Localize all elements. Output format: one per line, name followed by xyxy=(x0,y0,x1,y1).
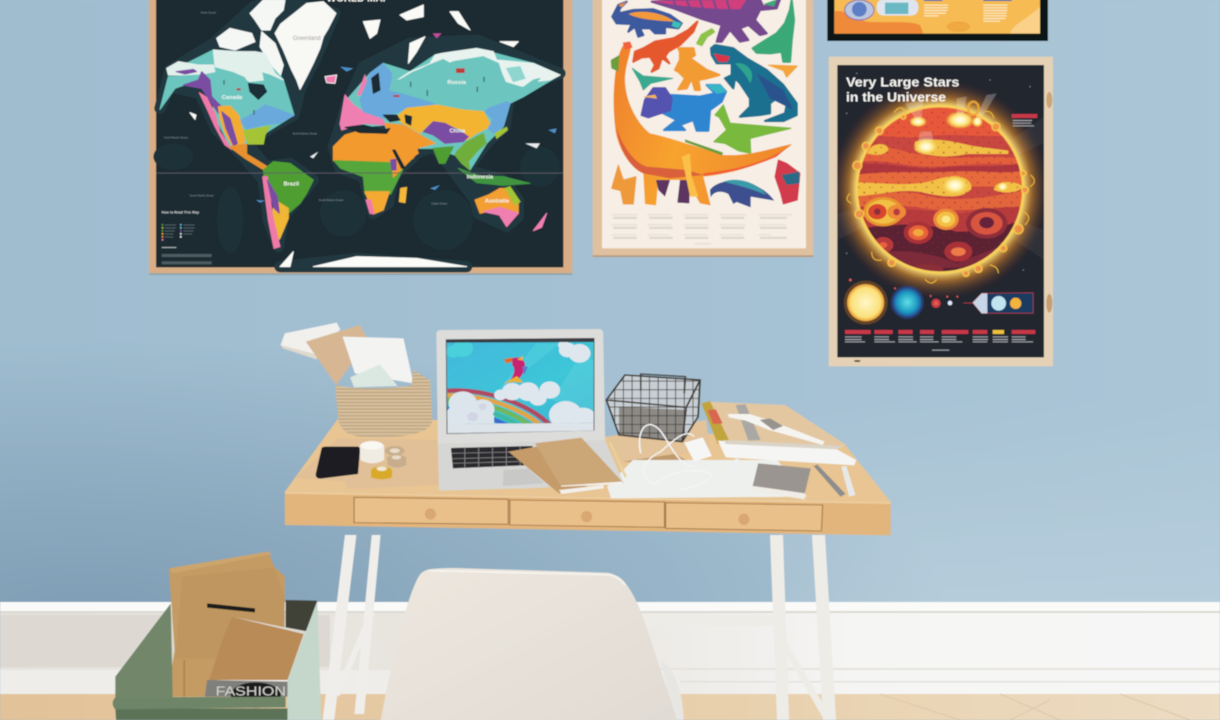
laptop wallpaper xyxy=(446,341,594,424)
canada forest xyxy=(160,75,293,115)
dinosaur: green tall xyxy=(753,0,794,62)
envelopes xyxy=(167,552,304,697)
dinosaur: purple crested xyxy=(652,0,780,42)
laptop bird xyxy=(504,356,528,383)
phone xyxy=(316,447,360,479)
dinosaur: ankylosaur bottom xyxy=(710,180,774,207)
dinosaur: yellow carnosaur xyxy=(675,48,719,90)
dinosaur: ankylosaur top xyxy=(612,2,682,37)
dinosaur: small yellow xyxy=(768,65,797,77)
magazine: FASHION xyxy=(216,684,286,698)
dinosaur: hadrosaur xyxy=(714,105,791,153)
storage bin with envelopes xyxy=(113,552,321,720)
hot spots xyxy=(913,138,939,155)
dinosaur: tyrannosaur xyxy=(711,45,797,121)
equator line xyxy=(156,172,563,174)
poster title: in the Universe xyxy=(846,89,946,104)
dinosaur: red bird xyxy=(775,160,800,204)
magazine xyxy=(205,680,288,708)
bin body xyxy=(113,601,321,720)
grey notebook xyxy=(752,463,811,499)
dinosaur: small lower left xyxy=(612,165,636,204)
pens xyxy=(722,458,855,497)
small stars comparison row xyxy=(844,279,1033,325)
star rim xyxy=(857,106,1023,273)
asia xyxy=(360,63,437,118)
desk with objects xyxy=(281,323,891,535)
kraft paper sheets xyxy=(295,402,846,489)
ocean labels: Indian Ocean xyxy=(431,202,448,206)
woven basket xyxy=(335,370,432,438)
map ocean depth halos xyxy=(160,0,560,267)
dinosaur: triceratops xyxy=(642,85,726,131)
map country labels: Brazil xyxy=(284,181,299,187)
map country labels: Indonesia xyxy=(467,175,494,181)
watch xyxy=(728,414,825,445)
papers in basket xyxy=(281,323,413,387)
desk front xyxy=(285,492,891,535)
map country labels xyxy=(222,36,510,204)
map legend: How to Read This Map xyxy=(162,210,199,214)
land base fills xyxy=(170,50,294,147)
laptop base xyxy=(438,441,624,491)
dinosaur: small teal xyxy=(632,68,673,90)
map country labels: China xyxy=(449,129,466,135)
dinosaur: sauropod xyxy=(611,41,792,205)
dinosaur: orange raptor xyxy=(633,22,697,72)
white paper xyxy=(607,460,807,498)
map country labels: Russia xyxy=(447,80,467,86)
africa xyxy=(333,131,413,163)
ocean labels xyxy=(164,10,448,206)
ocean labels: South Pacific Ocean xyxy=(190,193,214,197)
tape rolls xyxy=(360,441,406,479)
poster title: Very Large Stars xyxy=(846,75,959,90)
star data tables xyxy=(845,114,1037,351)
map country labels: Australia xyxy=(485,198,510,204)
map markers xyxy=(237,68,465,97)
panel: world map poster xyxy=(149,0,572,275)
dinosaur name captions xyxy=(612,214,792,244)
panel: very large stars poster xyxy=(829,57,1053,366)
map country labels: Greenland xyxy=(293,36,321,42)
light rays xyxy=(905,93,997,142)
charger xyxy=(684,437,712,462)
wire basket xyxy=(606,374,700,442)
pencil xyxy=(609,442,627,477)
map country labels: Canada xyxy=(222,95,243,101)
charging cable xyxy=(639,425,712,490)
canadian arctic islands xyxy=(217,0,285,75)
inland seas xyxy=(345,73,412,168)
ocean labels: Arctic Ocean xyxy=(201,10,216,14)
panel: dinosaur poster xyxy=(593,0,813,257)
laptop xyxy=(436,329,624,491)
small star field xyxy=(846,73,1031,271)
book stack with ruler xyxy=(701,401,856,465)
skirting board xyxy=(0,602,1220,695)
chair xyxy=(381,568,684,720)
greenland xyxy=(275,2,336,89)
dinosaur: small green xyxy=(697,29,714,45)
australia and islands xyxy=(475,188,518,213)
south america xyxy=(263,162,313,213)
ocean labels: South Atlantic Ocean xyxy=(319,198,344,202)
desk top surface xyxy=(285,418,891,502)
giant star body xyxy=(853,103,1027,277)
europe xyxy=(340,95,385,130)
map legend xyxy=(162,210,212,264)
rear right desk legs xyxy=(640,535,836,720)
front left desk legs xyxy=(323,535,381,720)
star glow xyxy=(830,79,1050,299)
map continents xyxy=(160,0,560,267)
floor xyxy=(0,694,1220,720)
ocean labels: North Pacific Ocean xyxy=(164,136,188,140)
panel: partly visible black framed poster xyxy=(827,0,1048,41)
ocean labels: North Atlantic Ocean xyxy=(293,132,318,136)
kraft notebooks xyxy=(508,438,622,494)
